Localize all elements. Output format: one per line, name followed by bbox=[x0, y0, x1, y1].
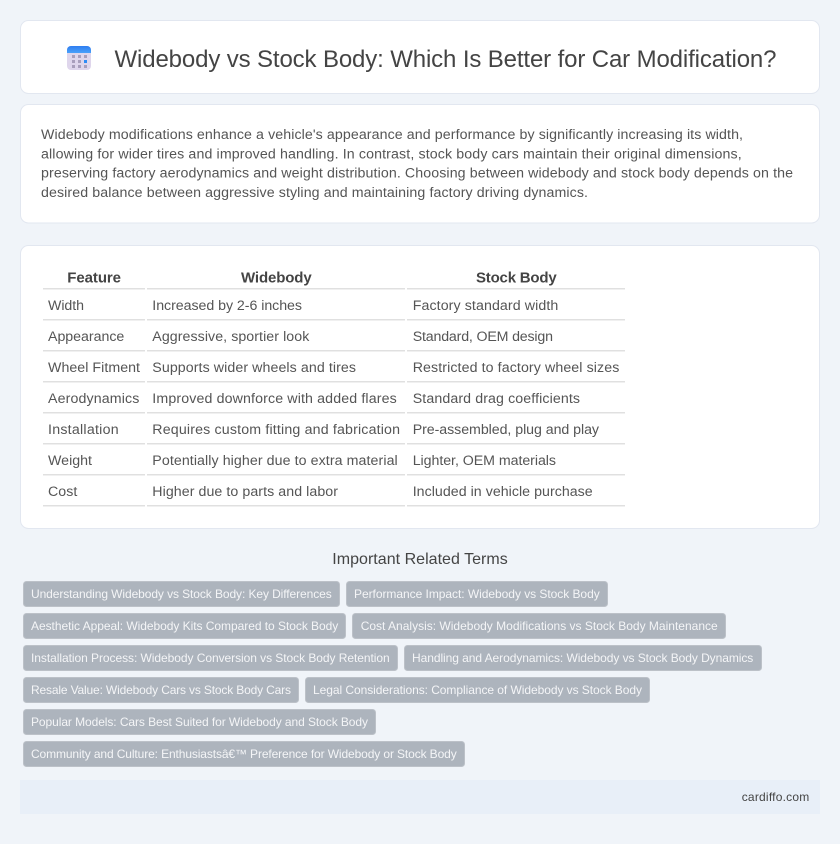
row: width: Factory standard width bbox=[413, 298, 558, 314]
intro text: allowing for wider tires and improved handling. In contrast, stock body cars maintain their original dimensions, bbox=[41, 146, 742, 162]
panel: introduction bbox=[20, 104, 820, 223]
intro text: Widebody modifications enhance a vehicle's appearance and performance by significantly increasing its width, bbox=[41, 127, 743, 143]
row: width: Increased by 2-6 inches bbox=[152, 298, 302, 314]
tag: community and culture bbox=[24, 742, 464, 766]
row: cost bbox=[48, 484, 593, 500]
panel: header bbox=[20, 20, 820, 94]
row: weight bbox=[48, 453, 556, 469]
row: weight: Lighter, OEM materials bbox=[413, 453, 556, 469]
row: aerodynamics bbox=[48, 391, 580, 407]
table header: Widebody bbox=[241, 270, 312, 287]
tag: resale value bbox=[24, 678, 298, 702]
footer bbox=[20, 780, 820, 814]
tag: performance impact bbox=[346, 582, 608, 606]
row: appearance bbox=[48, 329, 553, 345]
tag: aesthetic appeal: Aesthetic Appeal: Widebody Kits Compared to Stock Body bbox=[31, 619, 338, 633]
row: appearance: Aggressive, sportier look bbox=[152, 329, 310, 345]
row: installation bbox=[48, 422, 600, 438]
tag: key differences: Understanding Widebody vs Stock Body: Key Differences bbox=[31, 587, 332, 601]
row: cost: Included in vehicle purchase bbox=[413, 484, 593, 500]
icon: calendar bbox=[67, 46, 91, 70]
tag: performance impact: Performance Impact: Widebody vs Stock Body bbox=[354, 587, 600, 601]
tag: resale value: Resale Value: Widebody Cars vs Stock Body Cars bbox=[31, 683, 291, 697]
row: weight: Potentially higher due to extra material bbox=[152, 453, 398, 469]
intro text bbox=[41, 127, 793, 201]
row: weight: Weight bbox=[48, 453, 92, 469]
table header bbox=[67, 270, 557, 287]
row: installation: Pre-assembled, plug and play bbox=[413, 422, 600, 438]
table header: Stock Body bbox=[476, 270, 557, 287]
tag: installation process bbox=[24, 646, 398, 670]
tag: cost analysis bbox=[352, 614, 726, 638]
tag: community and culture: Community and Culture: Enthusiastsâ€™ Preference for Widebody or Stock Body bbox=[31, 747, 457, 761]
tag: aesthetic appeal bbox=[24, 614, 346, 638]
row: appearance: Standard, OEM design bbox=[413, 329, 553, 345]
tag: popular models bbox=[24, 710, 376, 734]
tag: installation process: Installation Process: Widebody Conversion vs Stock Body Retention bbox=[31, 651, 390, 665]
row: installation: Requires custom fitting and fabrication bbox=[152, 422, 400, 438]
panel: comparison table bbox=[20, 246, 820, 528]
tag: handling and aerodynamics bbox=[404, 646, 762, 670]
row: installation: Installation bbox=[48, 422, 119, 438]
row: aerodynamics: Improved downforce with added flares bbox=[152, 391, 397, 407]
row: cost: Cost bbox=[48, 484, 77, 500]
row: aerodynamics: Aerodynamics bbox=[48, 391, 139, 407]
tag: cost analysis: Cost Analysis: Widebody Modifications vs Stock Body Maintenance bbox=[361, 619, 718, 633]
tag: popular models: Popular Models: Cars Best Suited for Widebody and Stock Body bbox=[31, 715, 368, 729]
tag list: related terms bbox=[24, 582, 762, 766]
tag: handling and aerodynamics: Handling and Aerodynamics: Widebody vs Stock Body Dynamics bbox=[412, 651, 753, 665]
row: width: Width bbox=[48, 298, 84, 314]
tag: legal considerations: Legal Considerations: Compliance of Widebody vs Stock Body bbox=[313, 683, 642, 697]
intro text: desired balance between aggressive styling and maintaining factory driving dynamics. bbox=[41, 185, 588, 201]
row: appearance: Appearance bbox=[48, 329, 124, 345]
table header: Feature bbox=[67, 270, 121, 287]
row: width bbox=[48, 298, 558, 314]
row: wheel fitment bbox=[48, 360, 619, 376]
footer: cardiffo.com bbox=[742, 790, 809, 804]
tag: legal considerations bbox=[306, 678, 650, 702]
row: aerodynamics: Standard drag coefficients bbox=[413, 391, 580, 407]
row: wheel fitment: Wheel Fitment bbox=[48, 360, 140, 376]
intro text: preserving factory aerodynamics and weight distribution. Choosing between widebody and stock body depends on the bbox=[41, 166, 793, 182]
row: wheel fitment: Supports wider wheels and tires bbox=[152, 360, 356, 376]
row: wheel fitment: Restricted to factory wheel sizes bbox=[413, 360, 619, 376]
title: Widebody vs Stock Body: Which Is Better for Car Modification? bbox=[114, 46, 776, 73]
heading: related terms: Important Related Terms bbox=[332, 551, 508, 568]
row: cost: Higher due to parts and labor bbox=[152, 484, 338, 500]
tag: key differences bbox=[24, 582, 340, 606]
